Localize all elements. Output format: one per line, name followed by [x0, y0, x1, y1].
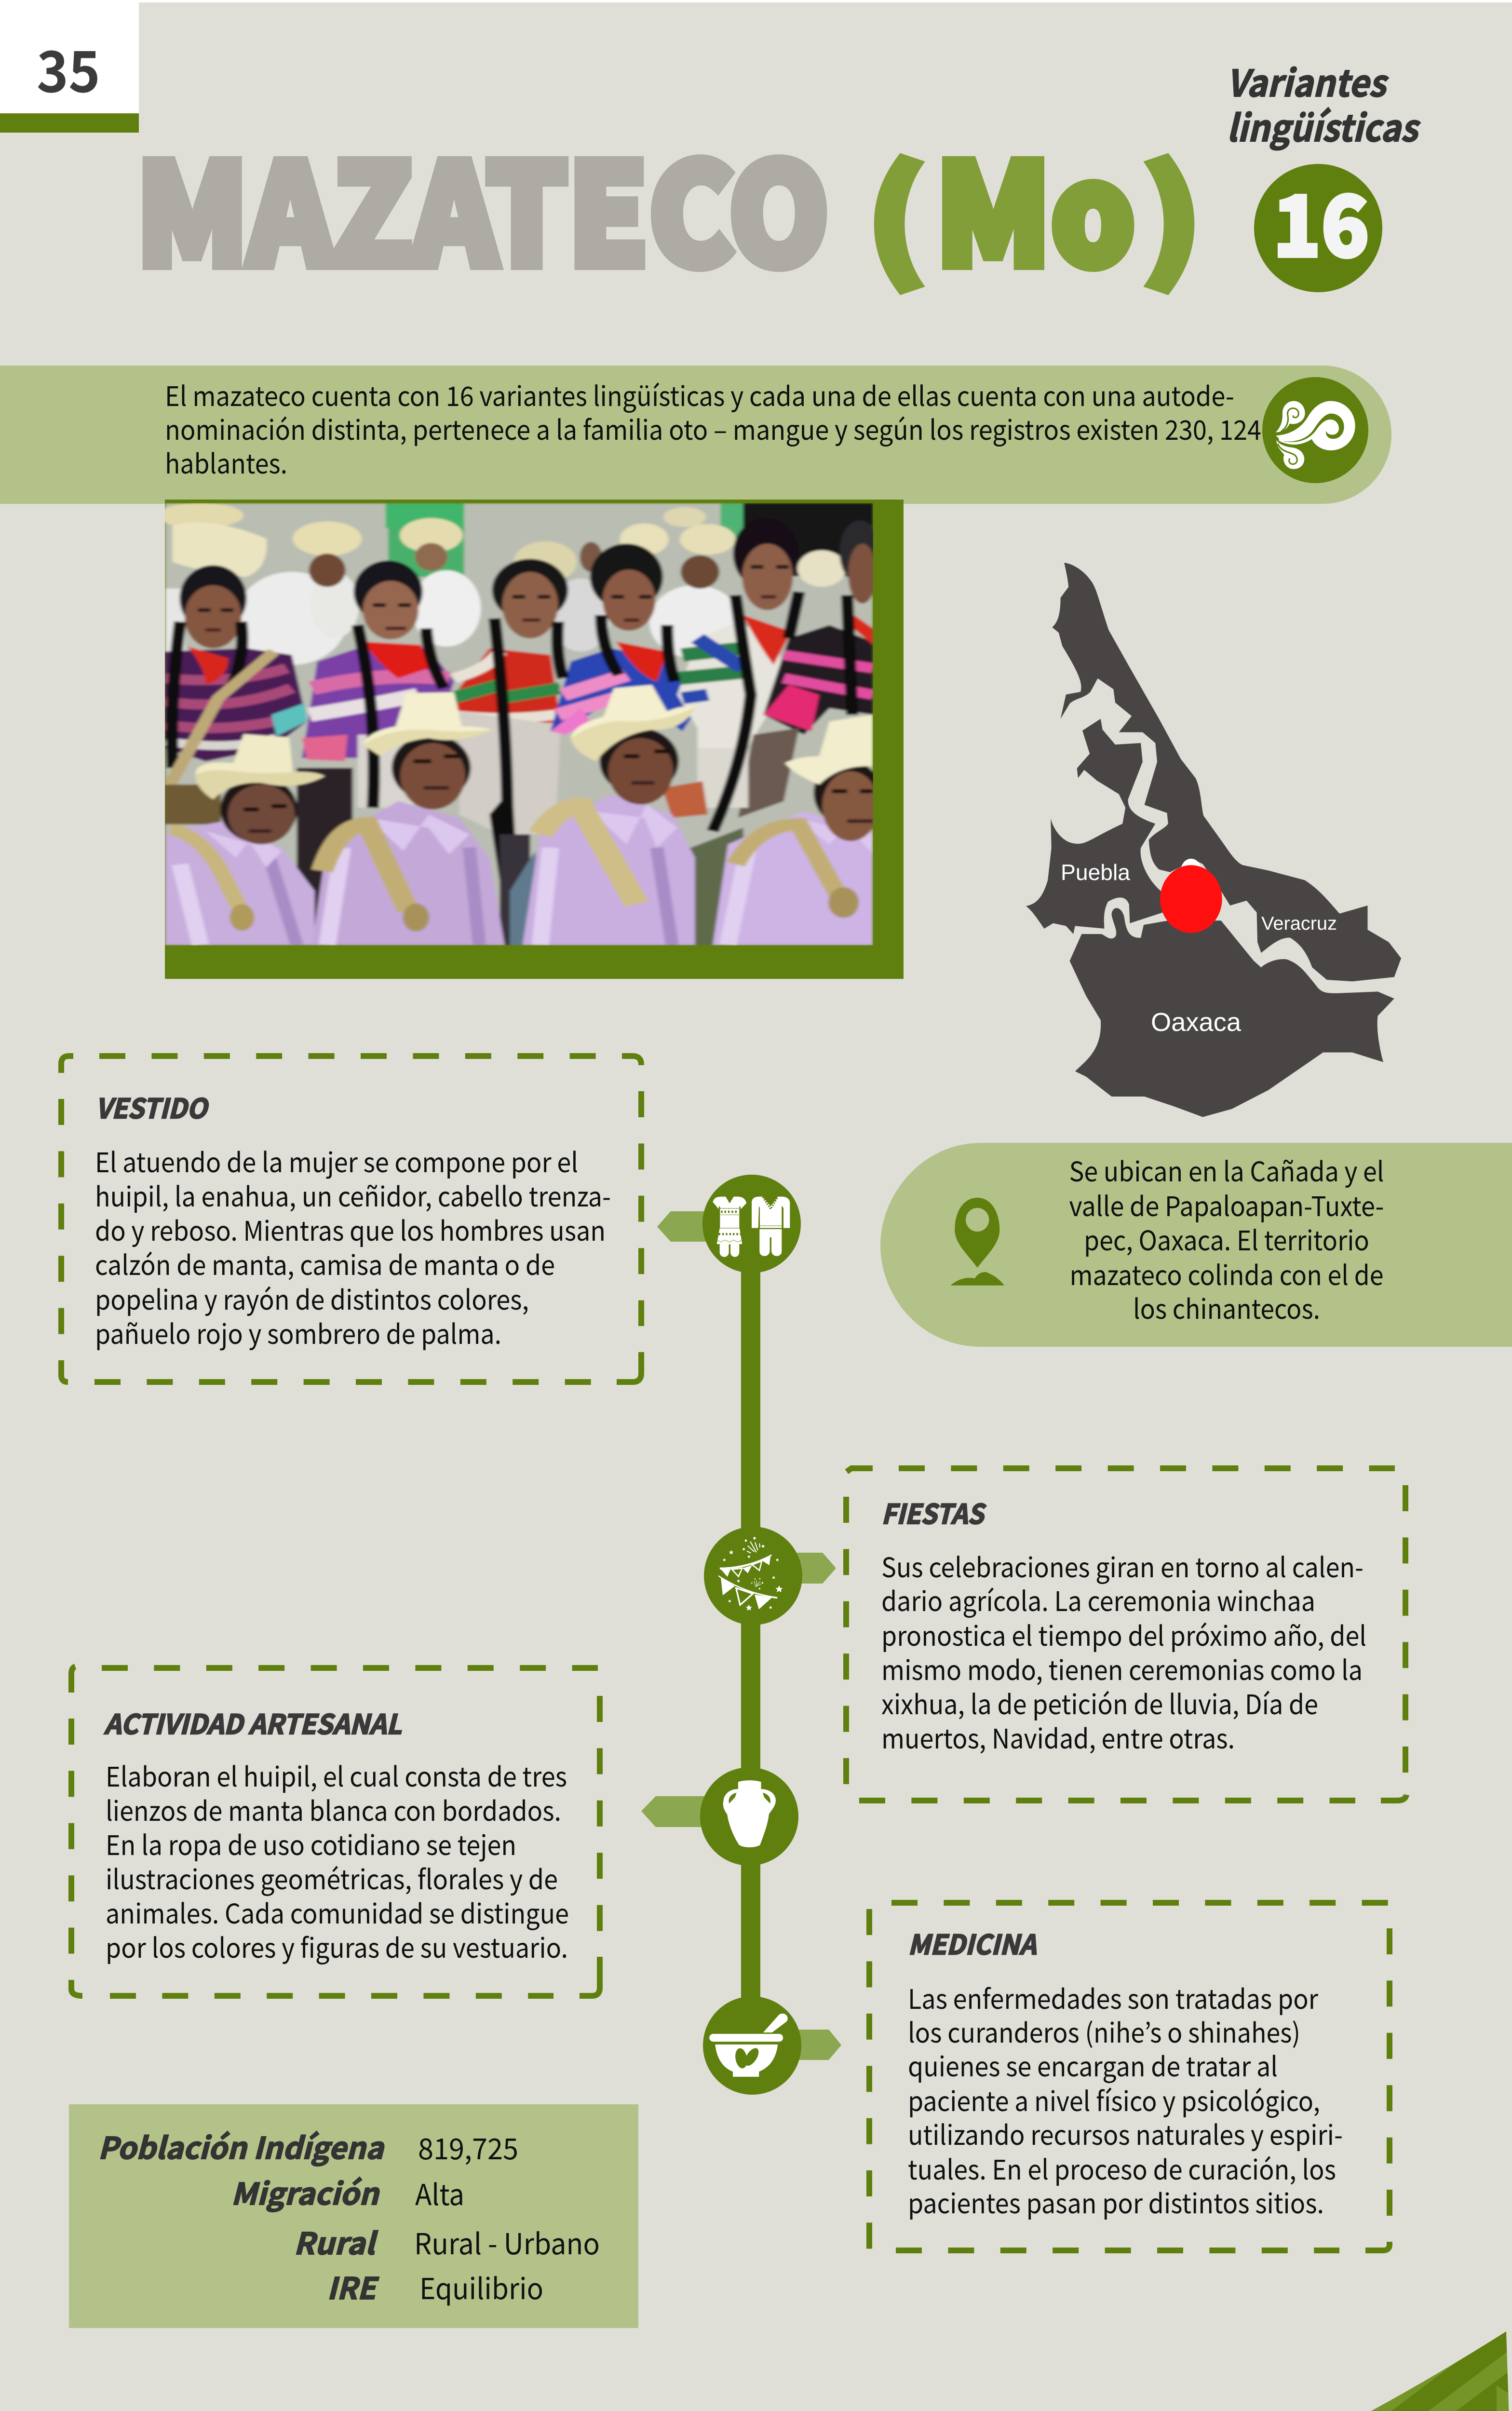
panel: fiestas: dario agrícola. La ceremonia winchaa [881, 1580, 1315, 1619]
panel: vestido: do y reboso. Mientras que los hombres usan [95, 1210, 606, 1249]
map of the territory [1026, 563, 1401, 1117]
panel: fiestas: muertos, Navidad, entre otras. [881, 1718, 1235, 1757]
arrow: to fiestas [791, 1553, 836, 1584]
intro band: nominación distinta, pertenece a la familia oto – mangue y según los registros existen 230, 124 [165, 409, 1261, 448]
panel: statistics: IRE [327, 2264, 379, 2308]
arrow: to medicina [791, 2030, 841, 2060]
panel: medicina: tuales. En el proceso de curación, los [908, 2149, 1336, 2188]
icon: mortar and pestle [703, 1996, 801, 2095]
panel: medicina: utilizando recursos naturales y espiri- [908, 2114, 1343, 2153]
women: faces [185, 585, 242, 648]
title: ) [1140, 117, 1203, 302]
map of the territory: Oaxaca [1151, 1008, 1242, 1037]
woven pattern footer [0, 2331, 1512, 2411]
panel: vestido: pañuelo rojo y sombrero de palma. [95, 1313, 501, 1352]
panel: actividad artesanal: por los colores y figuras de su vestuario. [106, 1927, 568, 1966]
panel: fiestas: Sus celebraciones giran en torno al calen- [881, 1546, 1364, 1585]
panel: vestido: huipil, la enahua, un ceñidor, cabello trenza- [95, 1176, 611, 1215]
panel: statistics: 819,725 [418, 2126, 518, 2168]
icon: location pin [950, 1198, 1004, 1286]
panel: actividad artesanal: Elaboran el huipil, el cual consta de tres [106, 1756, 567, 1795]
blouses [165, 648, 307, 761]
back hats [165, 503, 245, 527]
panel: statistics: Rural - Urbano [414, 2221, 600, 2263]
panel: medicina: Las enfermedades son tratadas por [908, 1978, 1318, 2017]
location callout: mazateco colinda con el de [1069, 1254, 1384, 1293]
top white strip [139, 0, 1512, 2]
panel: actividad artesanal [71, 1666, 600, 1996]
panel: vestido: calzón de manta, camisa de manta o de [95, 1244, 555, 1283]
panel: vestido [61, 1056, 641, 1382]
panel: vestido: El atuendo de la mujer se compone por el [95, 1141, 578, 1180]
panel: statistics: Equilibrio [419, 2266, 543, 2308]
panel: statistics: Población Indígena [98, 2124, 385, 2167]
panel: statistics: Alta [415, 2172, 464, 2214]
location callout: Se ubican en la Cañada y el [1069, 1151, 1384, 1190]
photo: mazatec group in traditional dress [157, 500, 904, 979]
icon: clothing [702, 1175, 801, 1273]
men: faces [220, 776, 297, 843]
heading: variantes lingüísticas [1227, 54, 1421, 152]
icon: swirl [1262, 377, 1368, 483]
title: MAZATECO [136, 103, 829, 306]
page number tab [0, 0, 139, 133]
panel: statistics: Rural [294, 2220, 378, 2263]
panel: actividad artesanal: ACTIVIDAD ARTESANAL [104, 1703, 402, 1742]
men: shirts [165, 821, 314, 945]
lower dark [297, 768, 352, 945]
map of the territory: Puebla [1061, 860, 1130, 885]
panel: statistics: Migración [231, 2170, 380, 2213]
heading: variantes lingüísticas: lingüísticas [1227, 99, 1421, 152]
location callout [880, 1143, 1512, 1347]
panel: actividad artesanal: animales. Cada comunidad se distingue [106, 1893, 569, 1932]
intro band: hablantes. [165, 443, 287, 482]
tan strap woman 1 [170, 651, 274, 785]
map of the territory: Veracruz [1261, 913, 1337, 934]
page number tab: 35 [37, 26, 100, 108]
panel: medicina: MEDICINA [908, 1923, 1037, 1963]
icon: clay vase [700, 1767, 798, 1866]
arrow: to actividad artesanal [641, 1796, 709, 1827]
panel: fiestas [846, 1468, 1406, 1801]
panel: actividad artesanal: En la ropa de uso cotidiano se tejen [106, 1824, 516, 1863]
location callout: los chinantecos. [1133, 1288, 1320, 1327]
badge: 16 variants: 16 [1273, 159, 1369, 281]
men: straps [170, 829, 246, 921]
arrow: to vestido [657, 1211, 714, 1242]
braids [172, 592, 852, 874]
panel: actividad artesanal: lienzos de manta blanca con bordados. [106, 1790, 561, 1829]
panel: statistics [69, 2104, 638, 2328]
timeline spine [741, 1224, 760, 2045]
heading: variantes lingüísticas: Variantes [1227, 54, 1389, 107]
panel: fiestas: xixhua, la de petición de lluvia, Día de [881, 1683, 1318, 1722]
panel: vestido: VESTIDO [95, 1087, 210, 1126]
panel: vestido: popelina y rayón de distintos colores, [95, 1279, 529, 1318]
intro band [0, 366, 1391, 504]
panel: actividad artesanal: ilustraciones geométricas, florales y de [106, 1858, 558, 1897]
intro band: El mazateco cuenta con 16 variantes lingüísticas y cada una de ellas cuenta con una autode- [165, 375, 1234, 414]
panel: medicina [869, 1903, 1390, 2250]
panel: medicina: paciente a nivel físico y psicológico, [908, 2080, 1320, 2119]
panel: medicina: pacientes pasan por distintos sitios. [908, 2182, 1324, 2221]
panel: medicina: quienes se encargan de tratar al [908, 2045, 1278, 2085]
title: Mo [935, 103, 1135, 306]
icon: party bunting [704, 1527, 802, 1625]
men: hats [195, 734, 324, 799]
location callout: pec, Oaxaca. El territorio [1084, 1219, 1369, 1259]
panel: medicina: los curanderos (nihe’s o shinahes) [908, 2012, 1300, 2051]
panel: fiestas: mismo modo, tienen ceremonias como la [881, 1649, 1363, 1688]
location callout: valle de Papaloapan-Tuxte- [1069, 1185, 1384, 1224]
panel: fiestas: FIESTAS [881, 1493, 986, 1532]
women: hair [177, 564, 249, 616]
title: ( [865, 117, 928, 302]
panel: fiestas: pronostica el tiempo del próximo año, del [881, 1615, 1366, 1654]
